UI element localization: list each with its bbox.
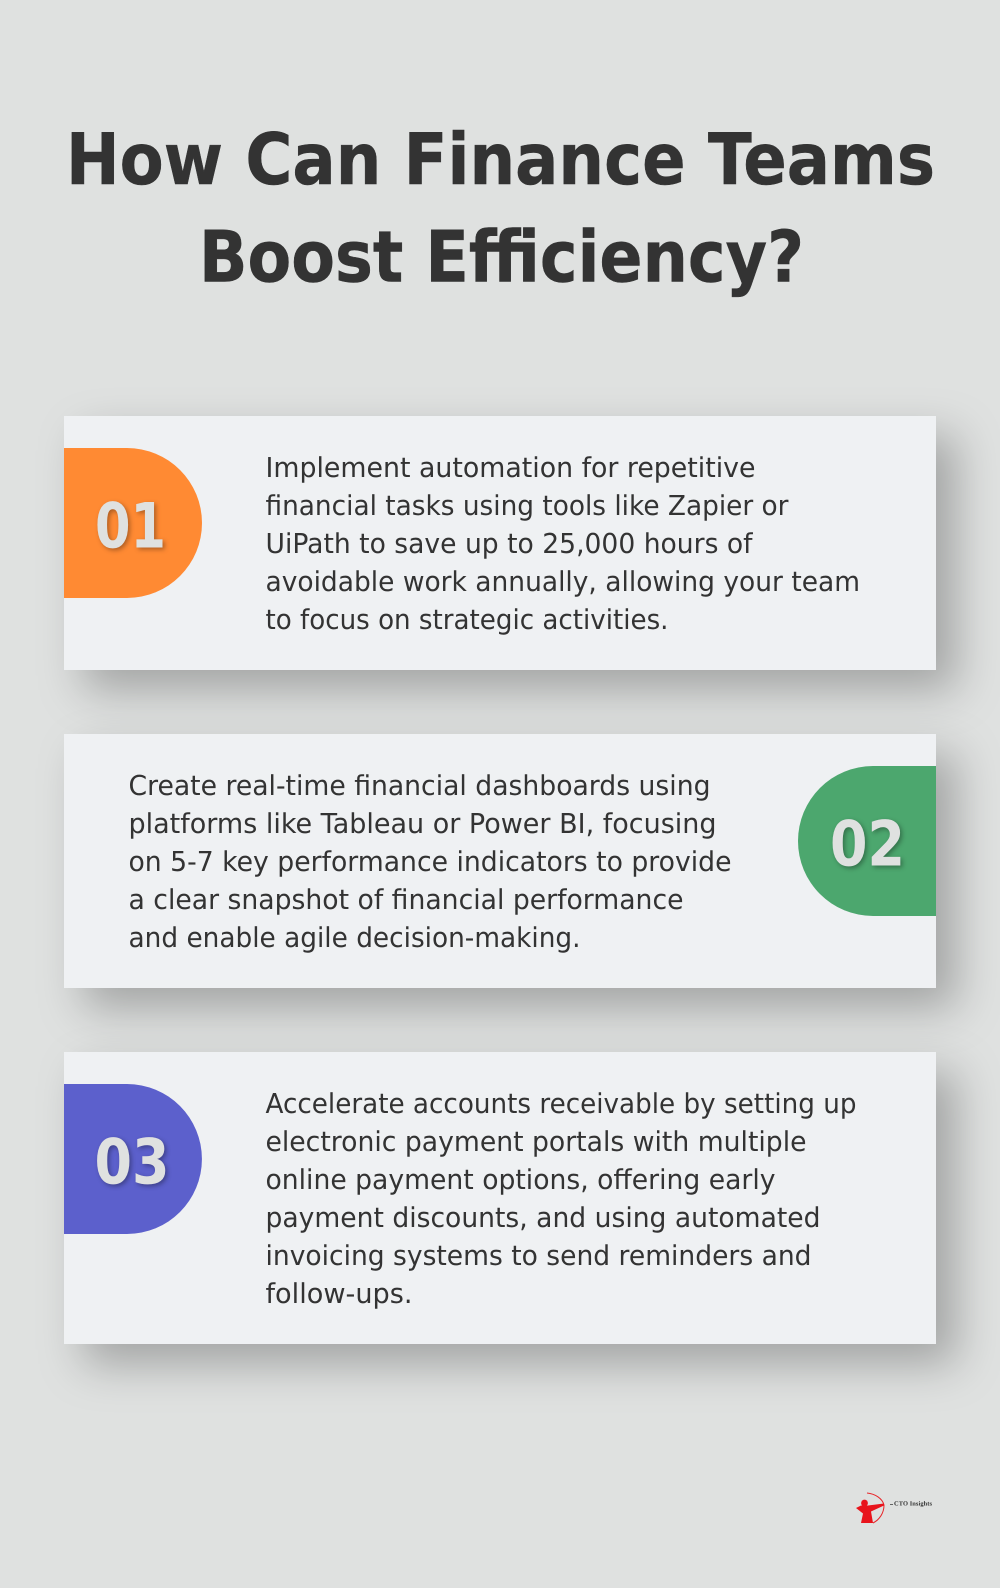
panel: step 01 (64, 416, 936, 670)
text block: step 02 description: and enable agile decision-making. (128, 923, 580, 954)
text block: step 03 description: Accelerate accounts receivable by setting up (266, 1089, 856, 1120)
text block: step 03 description: follow-ups. (266, 1279, 412, 1310)
text block: step 02 description: platforms like Tableau or Power BI, focusing (128, 809, 716, 840)
badge: 02: 02 (830, 808, 905, 880)
text block: step 01 description (266, 453, 860, 636)
panel: step 02 (64, 734, 936, 988)
text block: step 01 description: avoidable work annually, allowing your team (266, 567, 860, 598)
text block: step 01 description: UiPath to save up to 25,000 hours of (266, 529, 754, 560)
text block: step 03 description: electronic payment portals with multiple (266, 1127, 806, 1158)
text block: step 01 description: financial tasks using tools like Zapier or (266, 491, 789, 522)
text block: step 02 description (128, 771, 732, 954)
text block: step 01 description: Implement automation for repetitive (266, 453, 756, 484)
text block: step 02 description: on 5-7 key performance indicators to provide (128, 847, 732, 878)
text block: step 03 description: payment discounts, and using automated (266, 1203, 820, 1234)
title (66, 118, 935, 298)
logo: CTO Insights archer (856, 1493, 932, 1523)
text block: step 02 description: Create real-time financial dashboards using (128, 771, 710, 802)
badge: 01: 01 (95, 490, 166, 562)
text block: step 03 description (266, 1089, 856, 1310)
badge: 03: 03 (94, 1126, 170, 1198)
logo: CTO Insights archer: CTO Insights (894, 1500, 932, 1508)
panel: step 03 (64, 1052, 936, 1344)
badge: 03 (64, 1084, 202, 1234)
text block: step 01 description: to focus on strategic activities. (266, 605, 668, 636)
text block: step 02 description: a clear snapshot of financial performance (128, 885, 684, 916)
badge: 02 (798, 766, 936, 916)
title: How Can Finance Teams (66, 118, 935, 201)
text block: step 03 description: online payment options, offering early (266, 1165, 776, 1196)
badge: 01 (64, 448, 202, 598)
title: Boost Efficiency? (199, 216, 804, 298)
text block: step 03 description: invoicing systems to send reminders and (266, 1241, 812, 1272)
